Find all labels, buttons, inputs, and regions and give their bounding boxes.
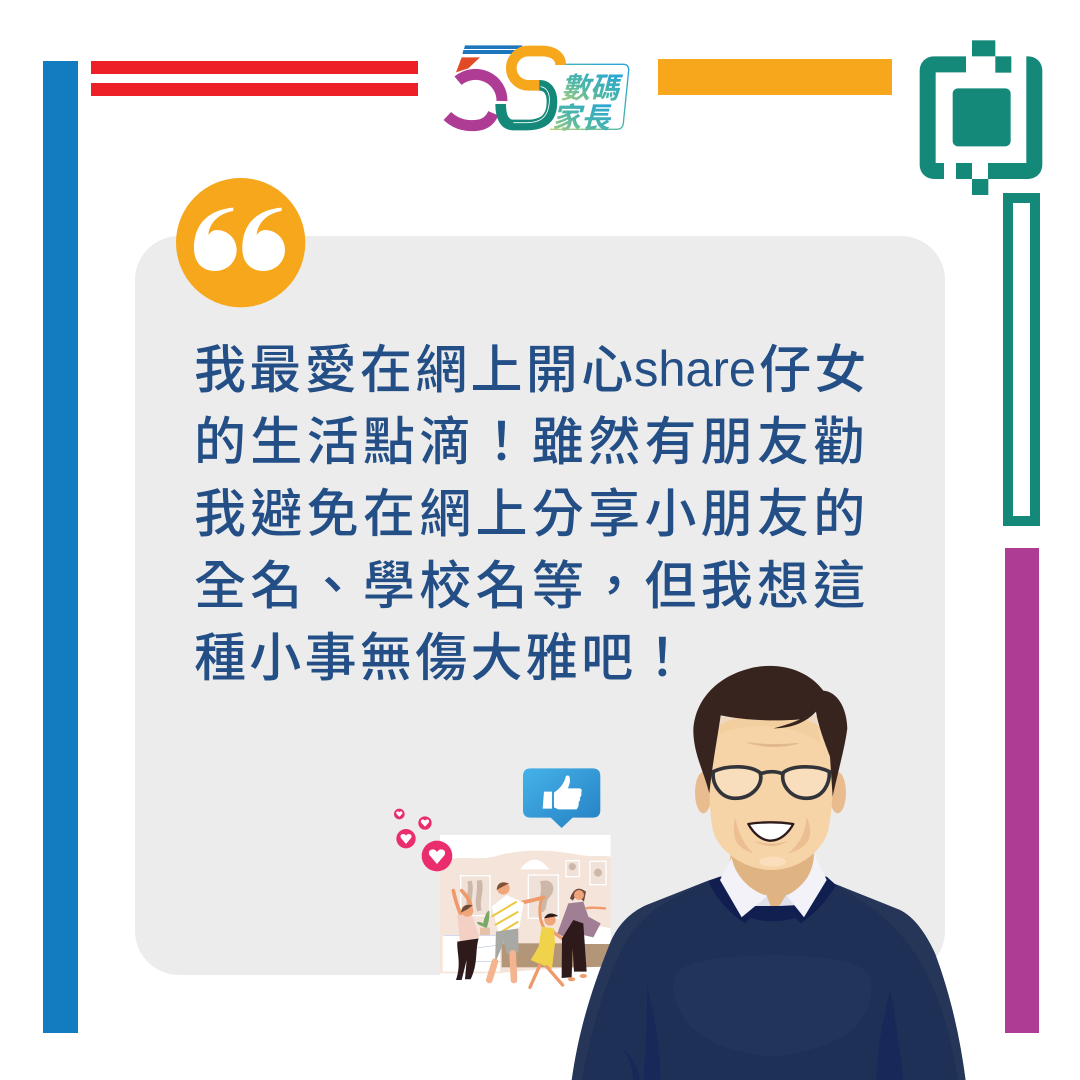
smile (748, 822, 793, 841)
hair (693, 666, 847, 797)
quote text: 的生活點滴！雖然有朋友勸 (194, 414, 870, 472)
quote text: share (634, 341, 756, 397)
logo: S curve orange (511, 51, 561, 85)
red double stripes (91, 61, 418, 96)
illustration: family photo (394, 768, 611, 990)
green outlined bar (1008, 198, 1035, 521)
woman seated (557, 889, 605, 981)
girl left (453, 891, 479, 980)
face (709, 715, 833, 870)
logo: caption: 家長 (552, 103, 612, 135)
quote text: 我最愛在網上開心 (194, 342, 636, 400)
orange top bar (658, 59, 892, 95)
quote text: 全名、學校名等，但我想這 (194, 558, 870, 616)
quote text (194, 341, 870, 688)
purple side bar (1005, 548, 1039, 1033)
ears (695, 772, 712, 813)
collar (720, 854, 827, 917)
collar shadow (753, 894, 795, 906)
icon: thumbs up bubble (523, 768, 600, 828)
wall art (461, 861, 606, 918)
girl yellow dress (530, 898, 575, 987)
logo: S curve green (501, 85, 552, 125)
logo: caption: 數碼 (561, 73, 624, 105)
dresser (443, 935, 500, 972)
man striped shirt (489, 882, 544, 980)
logo: five top stripes (456, 45, 523, 72)
quote text: 仔女 (759, 342, 870, 400)
plant (477, 911, 489, 928)
logo: 55 digital parents (447, 45, 629, 135)
panel: quote background (135, 236, 945, 975)
cheek folds (734, 817, 753, 853)
blue side bar (43, 61, 78, 1033)
icon: quotation mark (176, 178, 305, 307)
character: father (572, 666, 966, 1080)
logo: caption (552, 73, 624, 135)
sweater (572, 877, 966, 1080)
logo: frame outline (550, 64, 629, 129)
logo: five curve (447, 74, 502, 126)
quote text: 種小事無傷大雅吧！ (194, 630, 692, 688)
icon: green pixel bracket (920, 40, 1042, 195)
bench (502, 943, 611, 967)
head, neck and collar (693, 666, 847, 917)
neck (727, 850, 817, 906)
photo backdrop (440, 835, 611, 990)
quote text: 我避免在網上分享小朋友的 (194, 486, 870, 544)
icon: hearts (394, 809, 452, 871)
glasses (713, 767, 829, 798)
